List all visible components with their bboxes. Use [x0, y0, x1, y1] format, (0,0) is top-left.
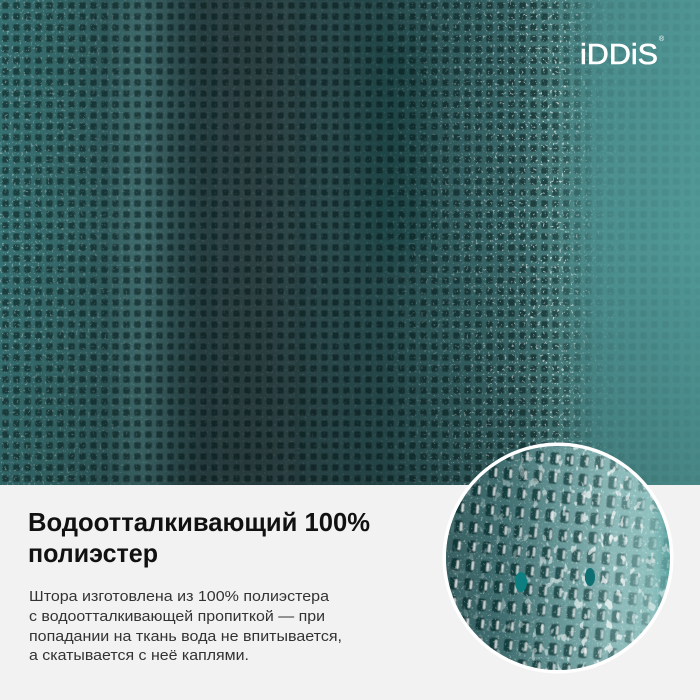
- body text: Штора изготовлена из 100% полиэстера: [29, 588, 330, 605]
- photo: teal waterproof fabric: [0, 0, 700, 485]
- heading: Водоотталкивающий 100%: [28, 507, 370, 537]
- body text: с водоотталкивающей пропиткой — при: [29, 608, 325, 625]
- zoom circle: fabric close-up: [440, 440, 676, 676]
- body text: [29, 588, 342, 664]
- logo: IDDIS: ®: [659, 35, 665, 43]
- logo: IDDIS: iDDiS: [580, 39, 658, 71]
- body text: а скатывается с неё каплями.: [29, 647, 249, 664]
- heading: полиэстер: [28, 538, 158, 568]
- heading: [28, 507, 370, 568]
- body text: попадании на ткань вода не впитывается,: [29, 628, 342, 645]
